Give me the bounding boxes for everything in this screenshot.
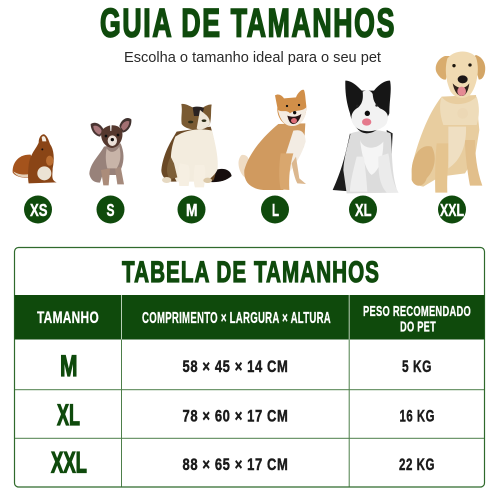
panel: size table — [14, 248, 484, 487]
icon: squirrel XS — [13, 134, 57, 183]
table header row: DO PET — [400, 320, 436, 336]
badge: S: S — [106, 200, 114, 220]
row: XL — [57, 399, 435, 432]
row: XXL: XXL — [51, 446, 87, 480]
icon: cat M — [161, 104, 232, 187]
table title: TABELA DE TAMANHOS — [122, 256, 380, 289]
badge: S — [96, 196, 124, 224]
row: XXL: 88 × 65 × 17 CM — [182, 455, 288, 474]
badge: XS — [24, 196, 52, 224]
badge: XXL — [438, 196, 466, 224]
icon: shiba L — [239, 90, 306, 190]
row: XXL — [51, 446, 435, 480]
badge: L: L — [272, 200, 279, 220]
table header row: COMPRIMENTO × LARGURA × ALTURA — [142, 310, 331, 327]
table header row: TAMANHO — [37, 309, 99, 327]
badge: L — [261, 196, 289, 224]
subtitle: Escolha o tamanho ideal para o seu pet — [124, 50, 381, 66]
badge: M — [178, 196, 206, 224]
row: M: M — [60, 350, 78, 383]
row: XL: 16 KG — [400, 407, 435, 426]
row: XL: XL — [57, 399, 80, 432]
row: M: 5 KG — [402, 357, 432, 376]
row: M — [60, 350, 432, 383]
row: XXL: 22 KG — [399, 455, 435, 474]
badge: XS: XS — [30, 200, 48, 220]
badge: XXL: XXL — [440, 200, 464, 220]
row: M: 58 × 45 × 14 CM — [182, 357, 288, 376]
icon: chihuahua S — [89, 118, 131, 185]
table grid lines — [15, 340, 484, 486]
badge: XL: XL — [355, 200, 372, 220]
row: XL: 78 × 60 × 17 CM — [182, 407, 288, 426]
icon: border collie XL — [333, 81, 399, 193]
table header row — [14, 295, 484, 340]
badge: XL — [349, 196, 377, 224]
badge: M: M — [186, 200, 198, 220]
icon: golden retriever XXL — [412, 51, 485, 193]
